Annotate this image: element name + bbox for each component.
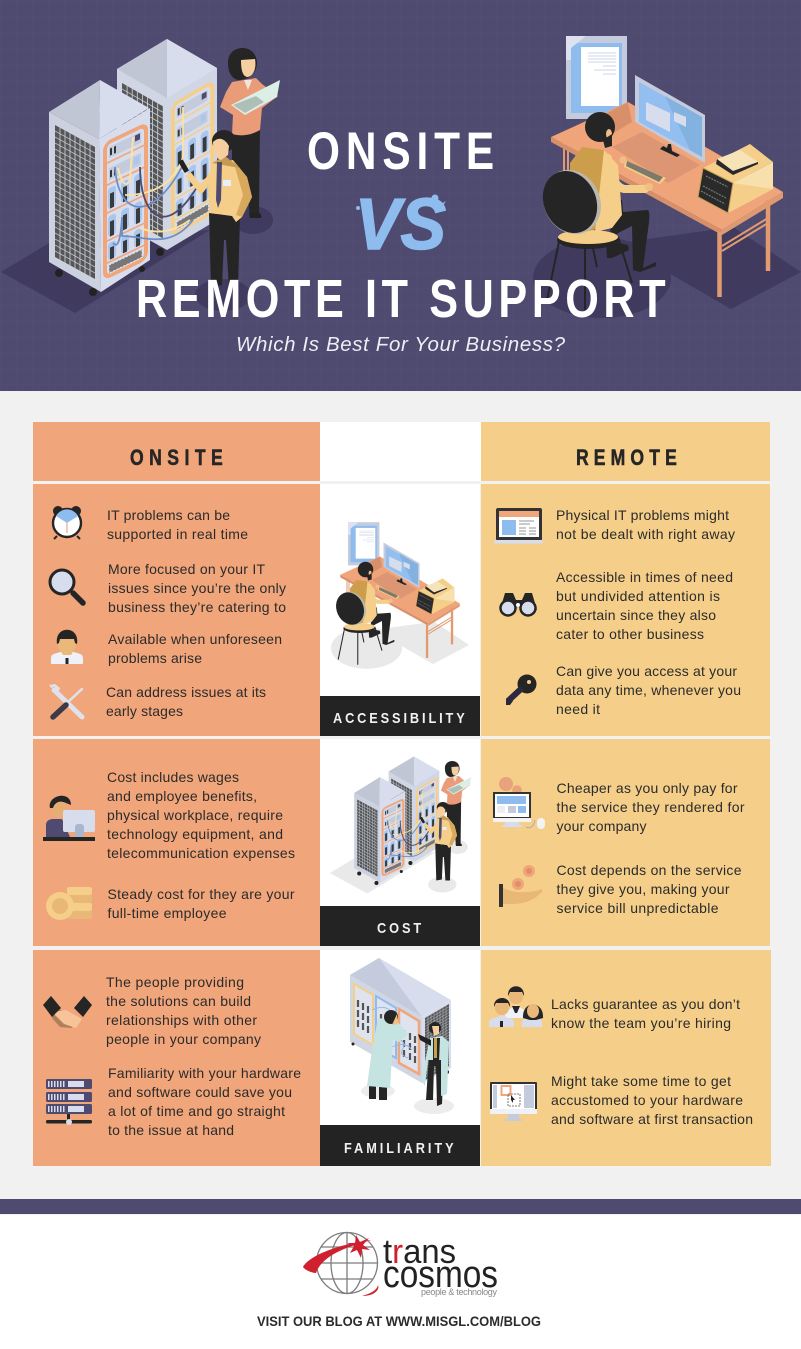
text: familiarity: a lot of time and go straight [108, 1103, 285, 1119]
logo: transcosmos [303, 1232, 498, 1297]
text: guarantee: know the team you’re hiring [551, 1015, 731, 1031]
text: relationships: The people providing [106, 974, 244, 990]
text: steady cost: Steady cost for they are your [108, 886, 295, 902]
title: remote it support: REMOTE IT SUPPORT [136, 270, 666, 329]
text: relationships [106, 974, 261, 1047]
row: cost remote panel [481, 739, 770, 946]
text: focused: More focused on your IT [108, 561, 265, 577]
text: focused: business they’re catering to [108, 599, 286, 615]
logo: transcosmos: trans [383, 1233, 456, 1271]
text: accessible: but undivided attention is [556, 588, 720, 604]
illustration: remote worker at desk [533, 36, 801, 318]
footer panel [0, 1215, 801, 1349]
text: cost depends: service bill unpredictable [556, 900, 719, 916]
text: cost includes: physical workplace, require [107, 807, 283, 823]
text: real time support: IT problems can be [107, 507, 230, 523]
icon: server stack [46, 1079, 92, 1125]
text: relationships: the solutions can build [106, 993, 251, 1009]
text: early stages: Can address issues at its [106, 684, 266, 700]
icon: computer with coins [493, 777, 545, 829]
text: guarantee: Lacks guarantee as you don’t [551, 996, 740, 1012]
text: focused: issues since you’re the only [108, 580, 286, 596]
text: accessible [556, 569, 733, 642]
text: focused [108, 561, 286, 615]
icon: employee at computer [43, 796, 95, 841]
icon: team of three [489, 986, 543, 1027]
row: familiarity onsite panel [33, 950, 320, 1166]
panel: familiarity illustration [320, 950, 480, 1125]
label: accessibility [320, 696, 480, 736]
label: familiarity [320, 1125, 480, 1166]
column header: onsite: ONSITE [130, 446, 223, 471]
text: available: problems arise [108, 650, 202, 666]
brush lettering: vs: VS [355, 185, 446, 265]
text: familiarity: Familiarity with your hardware [108, 1065, 301, 1081]
column header: centre blank [320, 422, 481, 481]
text: data access: need it [556, 701, 600, 717]
text: cost depends [556, 862, 742, 916]
text: accustomed: Might take some time to get [551, 1073, 731, 1089]
text: cheaper: Cheaper as you only pay for [556, 780, 738, 796]
icon: magnifying glass [50, 570, 83, 603]
illustration: desk worker [331, 522, 469, 669]
text: physical problems: not be dealt with right away [556, 526, 735, 542]
footer link text: VISIT OUR BLOG AT WWW.MISGL.COM/BLOG [257, 1313, 541, 1329]
text: familiarity: and software could save you [108, 1084, 292, 1100]
panel: cost illustration [320, 739, 480, 906]
icon: hand with coins [499, 865, 542, 907]
text: cost includes: technology equipment, and [107, 826, 283, 842]
text: physical problems [556, 507, 735, 542]
icon: key [506, 674, 536, 705]
icon: binoculars [500, 593, 537, 616]
panel: accessibility illustration [320, 484, 480, 696]
text: cost depends: they give you, making your [556, 881, 730, 897]
row: cost onsite panel [33, 739, 320, 946]
text: cost includes: and employee benefits, [107, 788, 257, 804]
text: cheaper: the service they rendered for [556, 799, 745, 815]
text: cost includes: Cost includes wages [107, 769, 239, 785]
text: physical problems: Physical IT problems might [556, 507, 729, 523]
text: accustomed: and software at first transaction [551, 1111, 753, 1127]
text: cost depends: Cost depends on the service [556, 862, 742, 878]
text: accessible: uncertain since they also [556, 607, 716, 623]
text: data access: data any time, whenever you [556, 682, 741, 698]
icon: alarm clock [53, 506, 81, 539]
text: steady cost: full-time employee [108, 905, 227, 921]
icon: laptop [494, 508, 543, 544]
text: accustomed: accustomed to your hardware [551, 1092, 743, 1108]
illustration: technicians at racks [330, 756, 471, 894]
text: relationships: relationships with other [106, 1012, 257, 1028]
row: accessibility onsite panel [33, 484, 320, 736]
label: cost: COST [377, 919, 422, 936]
icon: stacked coins [46, 887, 92, 920]
text: accessible: cater to other business [556, 626, 704, 642]
label: accessibility: ACCESSIBILITY [333, 709, 465, 726]
text: accustomed [551, 1073, 753, 1127]
illustration: lab coat technicians at server [350, 958, 454, 1114]
text: available [108, 631, 282, 666]
text: real time support [107, 507, 248, 542]
text: familiarity [108, 1065, 301, 1138]
text: cost includes [107, 769, 295, 861]
icon: wrench and screwdriver [49, 684, 82, 717]
text: real time support: supported in real time [107, 526, 248, 542]
logo: transcosmos: people & technology [421, 1287, 498, 1297]
text: early stages: early stages [106, 703, 183, 719]
text: accessible: Accessible in times of need [556, 569, 733, 585]
icon: desktop with interface [490, 1082, 537, 1121]
label: familiarity: FAMILIARITY [344, 1139, 454, 1156]
icon: handshake [43, 996, 92, 1028]
illustration: server racks with technicians [1, 39, 280, 313]
column header: remote: REMOTE [576, 446, 677, 471]
title: onsite: ONSITE [307, 123, 494, 181]
text: cheaper [556, 780, 745, 834]
text: relationships: people in your company [106, 1031, 261, 1047]
logo: transcosmos: cosmos [383, 1254, 498, 1296]
column header: remote [481, 422, 770, 481]
row: familiarity remote panel [481, 950, 771, 1166]
text: early stages [106, 684, 266, 719]
text: data access: Can give you access at your [556, 663, 737, 679]
footer band [0, 1199, 801, 1214]
label: cost [320, 906, 480, 946]
column header: onsite [33, 422, 320, 481]
text: familiarity: to the issue at hand [108, 1122, 234, 1138]
text: steady cost [108, 886, 295, 921]
text: cost includes: telecommunication expenses [107, 845, 295, 861]
text: available: Available when unforeseen [108, 631, 282, 647]
subtitle: Which Is Best For Your Business? [236, 333, 566, 356]
text: guarantee [551, 996, 740, 1031]
text: data access [556, 663, 741, 717]
icon: support person [51, 630, 83, 664]
header banner [0, 0, 801, 391]
text: cheaper: your company [556, 818, 646, 834]
row: accessibility remote panel [481, 484, 770, 736]
